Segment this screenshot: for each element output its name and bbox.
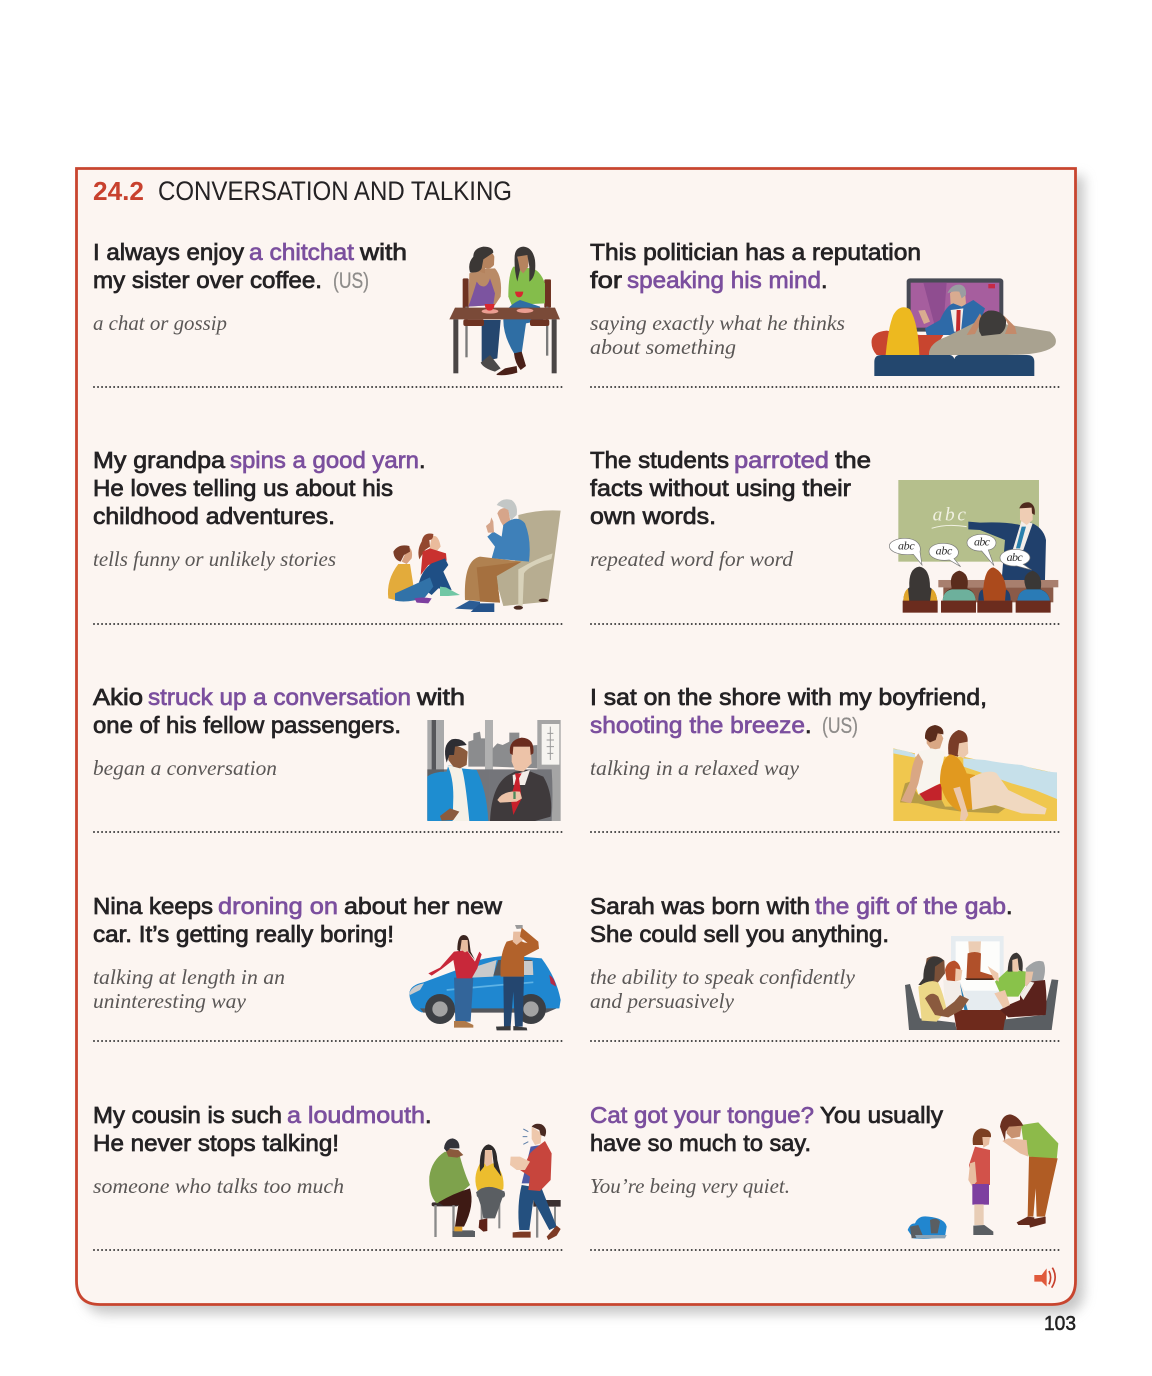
heading: 24.2 (93, 176, 144, 206)
illustration: couple watching a politician on TV (872, 278, 1056, 376)
illustration: woman questioning a quiet boy (908, 1114, 1058, 1288)
definition: talking in a relaxed way (590, 756, 799, 780)
sentence: The students (590, 447, 729, 473)
sentence: the (835, 447, 871, 473)
sentence: with (416, 684, 465, 710)
sentence: . (805, 712, 812, 738)
definition: repeated word for word (590, 547, 793, 571)
entry: parroted (590, 447, 1058, 613)
sentence: childhood adventures. (93, 503, 335, 529)
sentence (93, 239, 407, 293)
illustration: two women at a cafe table (449, 247, 560, 375)
sentence (590, 684, 987, 738)
panel shadow (84, 176, 1084, 1314)
heading: CONVERSATION AND TALKING (158, 176, 512, 206)
sentence: . (419, 447, 426, 473)
definition: the ability to speak confidently (590, 965, 855, 989)
sentence (590, 447, 871, 529)
sentence: He never stops talking! (93, 1130, 339, 1156)
sentence: . (821, 267, 828, 293)
divider row 4 (94, 1040, 1059, 1042)
sentence: droning on (218, 893, 338, 919)
sentence: shooting the breeze (590, 712, 805, 738)
sentence: My cousin is such (93, 1102, 282, 1128)
sentence: one of his fellow passengers. (93, 712, 401, 738)
sentence: facts without using their (590, 475, 851, 501)
definition: saying exactly what he thinks (590, 311, 845, 335)
definition: talking at length in an (93, 965, 285, 989)
icon: speaker (1034, 1268, 1055, 1288)
definition: about something (590, 335, 736, 359)
sentence: (US) (333, 268, 369, 293)
sentence: My grandpa (93, 447, 226, 473)
sentence: a chitchat (249, 239, 354, 265)
definition (590, 311, 845, 359)
illustration: woman talking about her blue car (409, 925, 561, 1030)
entry: shooting the breeze (590, 684, 1057, 821)
entry: a loudmouth (93, 1102, 561, 1240)
sentence (590, 1102, 943, 1156)
sentence: for (590, 267, 622, 293)
illustration: students repeating what a teacher says: a b c (933, 505, 966, 526)
sentence: (US) (822, 713, 858, 738)
sentence: He loves telling us about his (93, 475, 393, 501)
sentence: car. It’s getting really boring! (93, 921, 394, 947)
definition: began a conversation (93, 756, 277, 780)
sentence: about her new (344, 893, 503, 919)
illustration: grandfather telling stories to children (388, 499, 561, 612)
sentence: the gift of the gab (815, 893, 1006, 919)
illustration: two men talking on a train (427, 720, 561, 821)
definition (590, 965, 855, 1013)
entry: speaking his mind (590, 239, 1056, 376)
definition: someone who talks too much (93, 1174, 344, 1198)
sentence: . (425, 1102, 432, 1128)
speech bubbles: abc (936, 544, 953, 558)
divider row 5 (94, 1249, 1059, 1251)
divider row 3 (94, 831, 1059, 833)
sentence: You usually (820, 1102, 943, 1128)
sentence: Sarah was born with (590, 893, 810, 919)
sentence: She could sell you anything. (590, 921, 889, 947)
panel: conversation and talking (76, 168, 1076, 1304)
divider row 2 (94, 623, 1059, 625)
entry: cat got your tongue (590, 1102, 1058, 1288)
definition: tells funny or unlikely stories (93, 547, 336, 571)
sentence: my sister over coffee. (93, 267, 322, 293)
sentence: own words. (590, 503, 716, 529)
entry: struck up a conversation (93, 684, 561, 821)
speech bubbles: abc (898, 538, 915, 552)
sentence: Nina keeps (93, 893, 213, 919)
illustration: couple sitting on a beach (893, 725, 1057, 821)
sentence (93, 1102, 432, 1156)
definition: You’re being very quiet. (590, 1174, 790, 1198)
illustration: sales presentation in a meeting (905, 936, 1058, 1030)
sentence: parroted (734, 447, 829, 473)
sentence (590, 893, 1013, 947)
entry: a chitchat (93, 239, 560, 375)
definition: uninteresting way (93, 989, 246, 1013)
sentence: This politician has a reputation (590, 239, 921, 265)
definition: and persuasively (590, 989, 734, 1013)
sentence: I sat on the shore with my boyfriend, (590, 684, 987, 710)
sentence: have so much to say. (590, 1130, 811, 1156)
illustration: loud man annoying two seated people (429, 1124, 561, 1240)
sentence: I always enjoy (93, 239, 244, 265)
sentence: struck up a conversation (148, 684, 411, 710)
speech bubbles (889, 534, 1032, 570)
sentence: spins a good yarn (230, 447, 419, 473)
illustration: students repeating what a teacher says (889, 480, 1058, 613)
sentence: Akio (93, 684, 143, 710)
sentence: Cat got your tongue? (590, 1102, 814, 1128)
definition: a chat or gossip (93, 311, 227, 335)
sentence: speaking his mind (627, 267, 821, 293)
sentence (93, 893, 503, 947)
sentence (93, 447, 426, 529)
speech bubbles: abc (1007, 550, 1023, 564)
sentence (590, 239, 921, 293)
definition (93, 965, 285, 1013)
sentence (93, 684, 465, 738)
entry: spins a good yarn (93, 447, 561, 612)
speech bubbles: abc (974, 534, 991, 548)
page number: 103 (1044, 1313, 1076, 1335)
sentence: . (1006, 893, 1013, 919)
entry: droning on (93, 893, 561, 1030)
entry: the gift of the gab (590, 893, 1058, 1030)
sentence: a loudmouth (287, 1102, 425, 1128)
sentence: with (359, 239, 407, 265)
divider row 1 (94, 386, 1059, 388)
